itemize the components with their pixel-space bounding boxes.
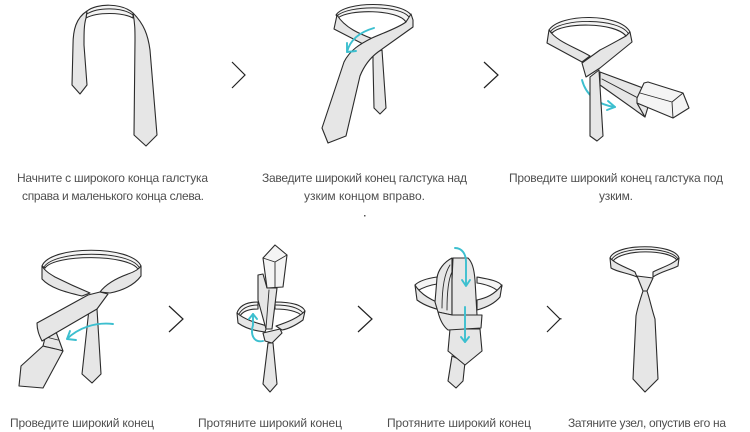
step 6 caption: Протяните широкий конец [387,416,531,430]
step 4 caption: Проведите широкий конец [10,416,154,430]
step 3 caption [509,171,723,203]
step 5 chevron [358,306,372,332]
step 1 caption [17,171,208,203]
step 4 chevron [169,306,183,332]
step 2 caption: Заведите широкий конец галстука над [262,171,467,185]
step 3 arrow [582,80,615,107]
step 3: wide end under narrow [547,17,689,141]
step 1 caption: Начните с широкого конца галстука [17,171,208,185]
step 1: tie around neck [72,5,157,146]
step 7 caption: Затяните узел, опустив его на [568,416,726,430]
step 2 chevron [484,62,498,88]
step 6 arrows [455,248,466,285]
stray dot [364,215,366,216]
step 2 arrow [347,28,374,52]
step 7: finished tie [610,247,679,392]
step 2 caption: узким концом вправо. [304,189,425,203]
step 6 chevron [547,306,560,332]
step 6: wide end pulled down through the knot [415,248,502,388]
step 3 caption: узким. [599,189,633,203]
step 4: wide end across the front [19,250,141,388]
step 1 chevron [232,62,245,88]
stray dot [560,318,562,320]
step 5: wide end pulled up through the neck loop [237,245,305,392]
step 2 caption [262,171,467,203]
step 4 arrow [67,324,113,339]
step 2: wide end crossed over narrow [322,4,413,143]
step 3 caption: Проведите широкий конец галстука под [509,171,723,185]
step 1 caption: справа и маленького конца слева. [22,189,204,203]
step 5 arrow [252,314,263,341]
step 5 caption: Протяните широкий конец [198,416,342,430]
